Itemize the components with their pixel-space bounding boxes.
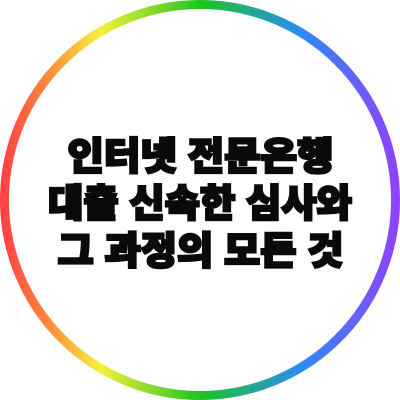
title: 대출 신속한 심사와 — [48, 184, 352, 226]
title: 인터넷 전문은행 — [68, 136, 334, 178]
title: 그 과정의 모든 것 — [58, 231, 344, 273]
title — [48, 136, 352, 273]
